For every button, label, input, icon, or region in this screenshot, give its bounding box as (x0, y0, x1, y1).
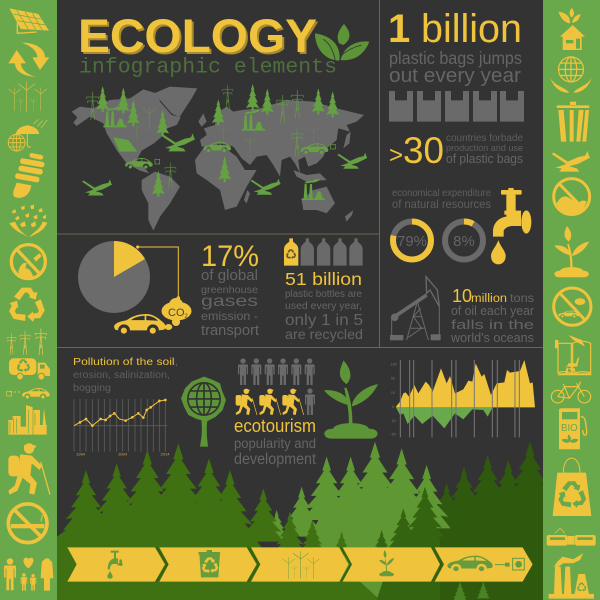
icon: umbrella globe (8, 119, 47, 151)
icon: city (8, 405, 47, 435)
title: ECOLOGY (80, 11, 319, 64)
subtitle: infographic elements (79, 56, 337, 80)
stat: ecotourism: development (234, 451, 317, 468)
donut 79% (393, 222, 431, 260)
heading: natural resources: of natural resources (392, 197, 491, 211)
icon: family (4, 558, 53, 591)
icon: hiker (8, 443, 50, 495)
panel dividers (57, 0, 543, 348)
left green strip (0, 0, 57, 600)
stat: 51 billion (285, 269, 363, 342)
icon: CO2 cloud: 2 (184, 314, 188, 320)
icon: faucet small (107, 551, 123, 579)
world map (72, 84, 367, 231)
left sidebar icons (4, 8, 53, 591)
icon: CO2 cloud (162, 298, 192, 330)
stat: 10 million (450, 286, 534, 345)
stat: 51 billion: 51 billion (285, 269, 362, 289)
icon: butterflies in hands (9, 205, 47, 237)
icon: leaves and house (559, 8, 585, 50)
icon: globe in hands (550, 57, 592, 93)
pollution heading (73, 357, 178, 394)
icon: no deforestation (554, 179, 590, 215)
icon: tree felling (552, 151, 590, 172)
arrow 5 (435, 547, 533, 582)
icon: recycling truck (9, 358, 50, 380)
icon: electric car (447, 556, 524, 571)
right sidebar icons (547, 8, 596, 599)
area chart: -50 (390, 432, 396, 436)
icon: no car emission (554, 288, 591, 325)
stat: 17%: of global (201, 267, 258, 284)
map continents (72, 87, 364, 231)
stat: 1 billion: 1 (388, 7, 410, 51)
icon: book and deer (555, 335, 591, 375)
stat: ecotourism: popularity and (234, 435, 316, 451)
area chart: 50 (391, 377, 395, 381)
stat: 17%: 17% (201, 240, 259, 273)
stat: ecotourism: ecotourism (234, 416, 316, 436)
icon: recycling bag (553, 458, 591, 516)
icon: sprout (554, 226, 589, 277)
icon: sprout (324, 361, 378, 439)
arrow 2 (159, 547, 259, 582)
icon: power lines (7, 328, 47, 355)
icon: car (114, 314, 165, 334)
donut 79%: 79% (397, 233, 427, 250)
icon: bio fuel pump: BIO (561, 423, 578, 434)
line chart: 2014 (161, 452, 170, 457)
connector: pie to CO2 (136, 245, 180, 300)
pie chart (78, 241, 150, 313)
area chart: 10 (391, 391, 395, 395)
area chart (390, 360, 535, 437)
stat: >30 countries: 30 (403, 130, 444, 171)
stat: 51 billion: used every year, (285, 300, 362, 312)
icon: solar panel (9, 8, 49, 33)
icon: recycle (6, 288, 49, 326)
stat: >30 countries: countries forbade (446, 133, 523, 144)
stat: >30 countries: production and use (446, 143, 523, 154)
icon: no sign (11, 245, 45, 279)
stat: 51 billion: are recycled (285, 326, 363, 342)
pollution heading: erosion, salinization, (73, 370, 170, 381)
stat: 17%: emission - (201, 309, 258, 323)
stat: 51 billion: only 1 in 5 (285, 312, 363, 329)
stat: ecotourism (234, 416, 317, 468)
icon: sprout small (379, 550, 394, 576)
stat: 17%: transport (201, 323, 259, 339)
stat text: plastic bags (389, 48, 522, 87)
area chart: -10 (390, 419, 396, 423)
forest (57, 442, 555, 600)
arrow 3 (251, 547, 351, 582)
stat: 10 million: of oil each year (451, 304, 534, 318)
arrow 4 (343, 547, 443, 582)
stat text: plastic bags: out every year (389, 65, 521, 87)
stat: >30 countries: > (389, 142, 403, 169)
donut 8%: 8% (453, 233, 475, 250)
icon: bio fuel pump (559, 408, 587, 449)
title: ECOLOGY (78, 9, 317, 62)
icon: faucet (491, 188, 531, 264)
pollution heading: Pollution of the soil , (73, 357, 178, 368)
icon: no smoking (8, 504, 47, 543)
donut 8% (445, 222, 483, 260)
line chart: 1994 (76, 452, 86, 457)
stat: 51 billion: plastic bottles are (285, 289, 362, 300)
stat text: plastic bags: plastic bags jumps (389, 48, 522, 68)
line chart (74, 399, 170, 457)
pollution heading: bogging (73, 383, 111, 394)
icon: recycle arrows (8, 43, 49, 77)
icon: leaves (315, 24, 369, 70)
stat: >30 countries: of plastic bags (446, 152, 523, 166)
stat: 17%: greenhouse (201, 284, 258, 296)
icon: electric car (7, 388, 50, 399)
icons: bottles (284, 238, 363, 266)
icon: factory (549, 553, 594, 599)
stat: 10 million: 10 (452, 286, 472, 306)
icon: oil pump (390, 277, 441, 340)
heading: natural resources (392, 188, 491, 211)
area chart: 100 (391, 362, 397, 366)
stat: 10 million: world's oceans (450, 331, 534, 345)
heading: natural resources: economical expenditure (392, 188, 491, 199)
right green strip (543, 0, 600, 600)
icon: bicycle (551, 382, 591, 403)
arrow chain (67, 547, 533, 582)
arrow 1 (67, 547, 167, 582)
icon: tram (547, 528, 596, 546)
icon: wind farm (9, 82, 47, 112)
icon: CO2 cloud: CO (168, 307, 184, 319)
stat: 10 million: tons (510, 293, 534, 305)
icon: wind turbines (282, 551, 320, 579)
stat: 17% (201, 240, 259, 339)
icon: globe tree (181, 377, 226, 447)
stat: 10 million: million (471, 293, 507, 305)
icon: energy saving bulb (13, 153, 45, 198)
stat: 10 million: falls in the (451, 317, 534, 332)
icons: plastic bags (389, 91, 524, 122)
area chart: 0 (392, 405, 394, 409)
stat: 17%: gases (201, 293, 258, 310)
icons: hikers (236, 389, 304, 415)
icons: people (238, 358, 315, 415)
map icons (82, 84, 367, 200)
stat: >30 countries (389, 130, 523, 171)
line chart: 2004 (118, 452, 128, 457)
icon: recycling bin (198, 550, 220, 577)
icon: trash bin (557, 102, 589, 142)
stat: 1 billion: billion (421, 7, 522, 51)
